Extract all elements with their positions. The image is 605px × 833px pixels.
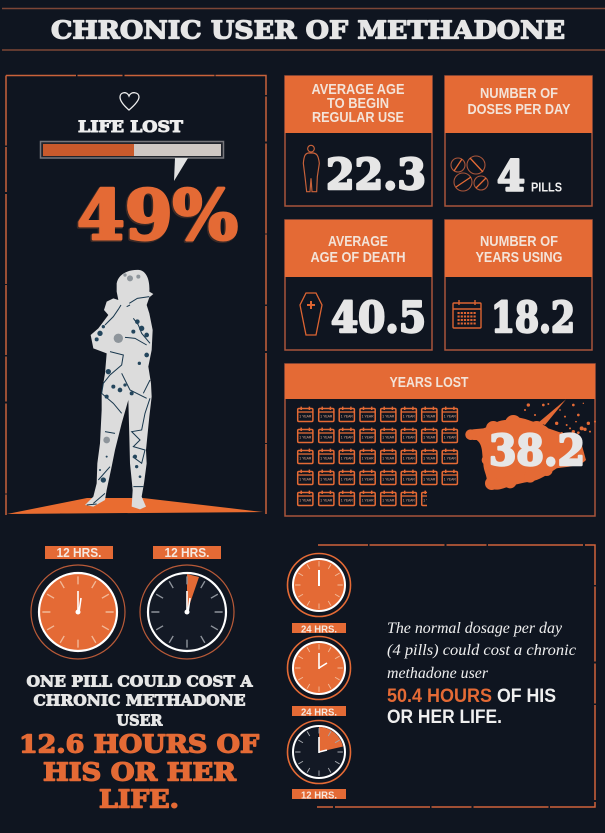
icon: heart <box>120 93 139 110</box>
title: CHRONIC USER OF METHADONE <box>51 16 565 44</box>
clock: 24 hrs first <box>288 554 350 616</box>
icon: person <box>303 145 319 192</box>
card heading: AVERAGE AGE <box>312 81 404 98</box>
script text <box>387 620 576 682</box>
text: one pill: CHRONIC METHADONE <box>34 692 246 710</box>
script text: (4 pills) could cost a chronic <box>387 642 576 659</box>
value: years lost: 38.2 <box>489 426 585 475</box>
panel: years lost <box>285 364 596 516</box>
text: 12.6 hours <box>19 730 259 814</box>
calendar grid: one per year: 1 YEAR <box>299 498 312 502</box>
calendar grid: one per year: 1 YEAR <box>423 414 436 418</box>
pointer <box>174 158 188 181</box>
panel heading: YEARS LOST <box>390 374 468 391</box>
calendar grid: one per year: 1 YEAR <box>444 414 456 418</box>
text: one pill: USER <box>116 712 163 730</box>
calendar grid: one per year: 1 YEAR <box>403 456 415 460</box>
calendar grid: one per year: 1 YEAR <box>320 436 333 440</box>
icon: pills <box>451 156 488 191</box>
calendar grid: one per year: 1 YEAR <box>299 436 312 440</box>
calendar grid: one per year: 1 YEAR <box>382 478 395 482</box>
text: one pill <box>26 674 253 730</box>
script text: The normal dosage per day <box>387 620 563 637</box>
icon: calendar <box>453 300 481 328</box>
calendar grid: one per year: 1 YEAR <box>382 498 395 502</box>
card heading: REGULAR USE <box>312 109 404 126</box>
calendar grid: one per year: 1 YEAR <box>341 456 353 460</box>
label: 12 hrs: 12 HRS. <box>56 545 102 560</box>
percentage: 49% <box>76 177 237 257</box>
card heading <box>312 81 404 126</box>
card heading <box>310 233 406 266</box>
label: 12 hrs: 12 HRS. <box>164 545 210 560</box>
card: doses per day <box>445 76 592 206</box>
heading: life lost: LIFE LOST <box>78 117 184 136</box>
calendar grid: one per year: 1 YEAR <box>341 414 353 418</box>
label: 24 hrs: 24 HRS. <box>301 706 337 718</box>
card heading <box>468 85 570 118</box>
script text: methadone user <box>387 665 489 682</box>
calendar grid: one per year: 1 YEAR <box>341 478 353 482</box>
card: years using <box>445 220 592 350</box>
calendar grid: one per year: 1 YEAR <box>299 478 312 482</box>
calendar grid: one per year: 1 YEAR <box>362 436 374 440</box>
calendar grid: one per year: 1 YEAR <box>341 436 353 440</box>
calendar grid: one per year: 1 YEAR <box>403 498 415 502</box>
calendar grid: one per year: 1 YEAR <box>403 436 415 440</box>
paint splat <box>465 399 596 490</box>
calendar grid: one per year: 1 YEAR <box>444 478 456 482</box>
text: one pill: ONE PILL COULD COST A <box>26 674 253 690</box>
calendar grid: one per year: 1 YEAR <box>320 456 333 460</box>
calendar grid: one per year: 1 YEAR <box>320 498 333 502</box>
calendar grid: one per year: 1 YEAR <box>444 456 456 460</box>
card: average age to begin <box>285 76 432 206</box>
text: 12.6 hours: HIS OR HER <box>43 758 237 786</box>
card heading: YEARS USING <box>476 249 562 266</box>
calendar grid: one per year: 1 YEAR <box>444 436 456 440</box>
unit: PILLS <box>531 180 562 194</box>
text: 50.4 hours <box>387 686 556 728</box>
card: average age of death <box>285 220 432 350</box>
calendar grid: one per year: 1 YEAR <box>423 436 436 440</box>
text: 50.4 hours: OF HIS <box>497 686 556 707</box>
card heading <box>476 233 562 266</box>
calendar grid: one per year: 1 YEAR <box>362 498 374 502</box>
calendar grid: one per year: 1 YEAR <box>299 456 312 460</box>
progress bar <box>40 142 224 158</box>
floor triangle <box>7 498 263 514</box>
calendar grid: one per year: 1 YEAR <box>362 478 374 482</box>
calendar grid: one per year: 1 YEAR <box>423 498 436 502</box>
card heading: NUMBER OF <box>480 85 558 102</box>
clock: 24 hrs second <box>288 636 350 700</box>
label: 12 hrs: 12 HRS. <box>301 790 337 802</box>
calendar grid: one per year: 1 YEAR <box>382 414 395 418</box>
calendar grid: one per year: 1 YEAR <box>423 478 436 482</box>
percentage: 49% <box>77 176 238 256</box>
calendar grid: one per year: 1 YEAR <box>382 436 395 440</box>
calendar grid: one per year: 1 YEAR <box>320 478 333 482</box>
icon: coffin <box>300 293 322 335</box>
calendar grid: one per year: 1 YEAR <box>362 414 374 418</box>
card heading: DOSES PER DAY <box>468 101 570 118</box>
value: 4 <box>497 152 525 200</box>
calendar grid: one per year: 1 YEAR <box>299 414 312 418</box>
value: 22.3 <box>326 150 426 199</box>
card heading: AVERAGE <box>328 233 388 250</box>
calendar grid: one per year: 1 YEAR <box>320 414 333 418</box>
calendar grid: one per year: 1 YEAR <box>341 498 353 502</box>
card heading: NUMBER OF <box>480 233 558 250</box>
card heading: AGE OF DEATH <box>310 249 406 266</box>
panel: life lost <box>6 76 266 515</box>
panel: normal dosage <box>317 545 595 807</box>
value: 40.5 <box>331 293 426 342</box>
value: 18.2 <box>491 293 575 342</box>
calendar grid: one per year: 1 YEAR <box>403 414 415 418</box>
calendar grid: one per year: 1 YEAR <box>382 456 395 460</box>
figure silhouette <box>85 270 153 509</box>
calendar grid: one per year: 1 YEAR <box>423 456 436 460</box>
calendar grid: one per year: 1 YEAR <box>362 456 374 460</box>
calendar grid: one per year: 1 YEAR <box>403 478 415 482</box>
label: 24 hrs: 24 HRS. <box>301 624 337 636</box>
text: 50.4 hours: OR HER LIFE. <box>387 707 502 728</box>
calendar grid: one per year <box>298 407 458 506</box>
text: 12.6 hours: LIFE. <box>99 784 179 814</box>
clock: full orange <box>31 565 125 659</box>
text: 12.6 hours: 12.6 HOURS OF <box>19 730 259 758</box>
clock: 2.4 hours slice <box>288 720 350 784</box>
text: 50.4 hours: 50.4 HOURS <box>387 686 492 707</box>
card heading: TO BEGIN <box>327 95 389 112</box>
clock: one pill slice <box>140 565 234 659</box>
